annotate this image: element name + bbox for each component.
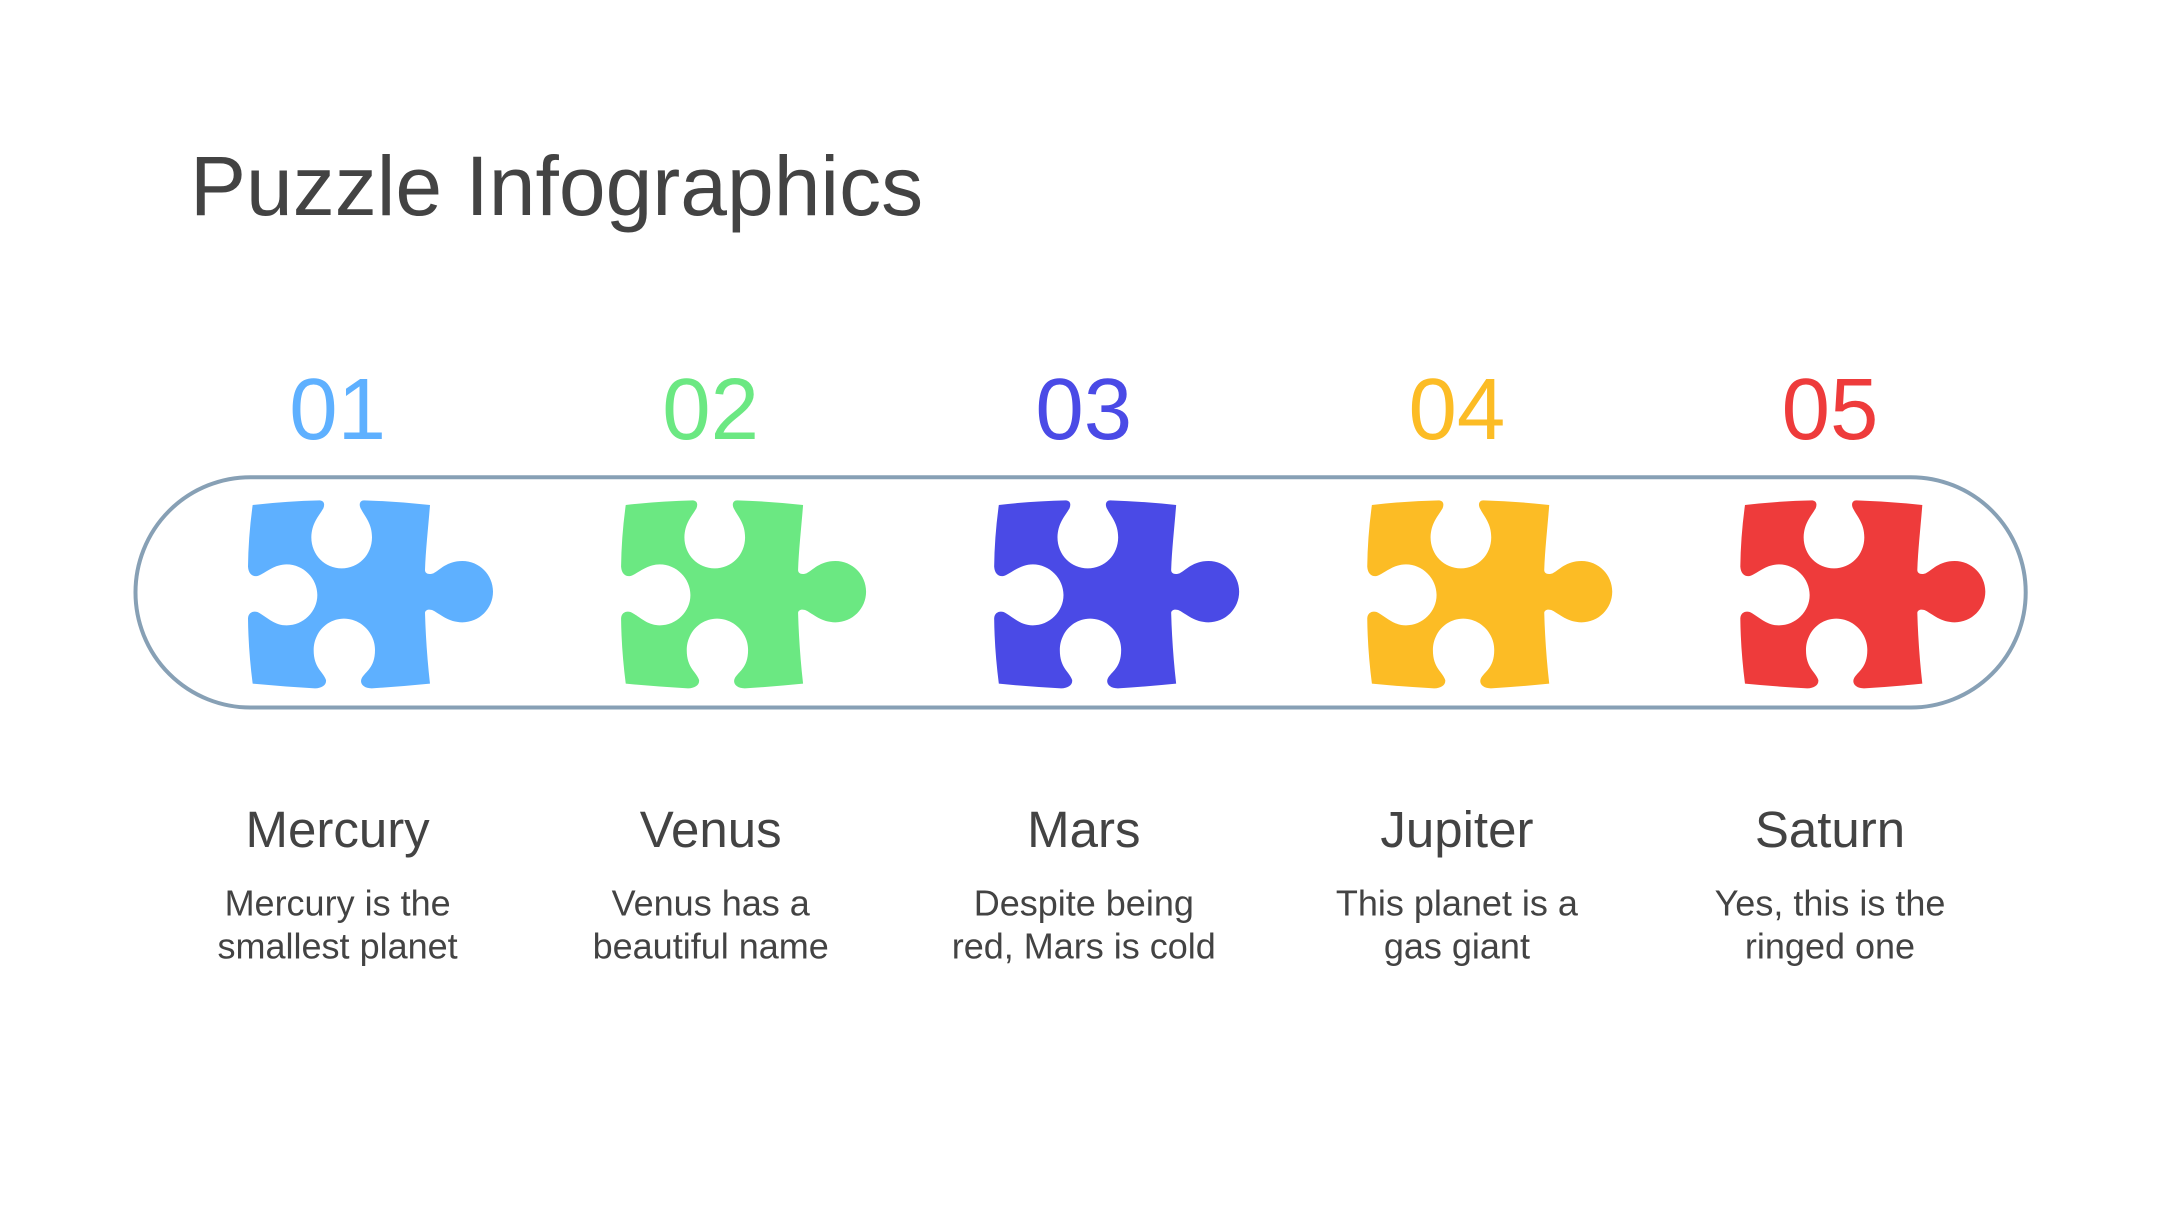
column 4: Jupiter <box>1336 361 1612 966</box>
icon: indigo puzzle piece <box>994 500 1239 688</box>
heading: Mars: Mars <box>1027 801 1140 858</box>
text: Mars description: Despite being <box>974 882 1194 924</box>
title: Puzzle Infographics <box>190 139 923 233</box>
icon: blue puzzle piece <box>248 500 493 688</box>
text: Saturn description: ringed one <box>1745 926 1915 966</box>
icon: yellow puzzle piece <box>1367 500 1612 688</box>
text: Jupiter description: gas giant <box>1384 926 1530 966</box>
column 3: Mars <box>952 361 1239 966</box>
column 2: Venus <box>593 361 866 966</box>
heading: Jupiter: Jupiter <box>1380 801 1533 858</box>
text: Jupiter description: This planet is a <box>1336 882 1579 924</box>
rounded capsule outline <box>136 477 2026 708</box>
text: Saturn description: Yes, this is the <box>1715 882 1945 924</box>
number 04: 04 <box>1409 361 1505 458</box>
heading: Venus: Venus <box>640 801 782 858</box>
text: Venus description: Venus has a <box>612 882 811 924</box>
text: Venus description: beautiful name <box>593 926 829 966</box>
icon: green puzzle piece <box>621 500 866 688</box>
text: Mercury description: Mercury is the <box>225 882 451 924</box>
heading: Saturn: Saturn <box>1755 801 1905 858</box>
text: Mars description: red, Mars is cold <box>952 926 1216 966</box>
column 5: Saturn <box>1715 361 1985 966</box>
icon: red puzzle piece <box>1740 500 1985 688</box>
column 1: Mercury <box>218 361 493 966</box>
text: Mercury description: smallest planet <box>218 926 458 966</box>
number 05: 05 <box>1782 361 1878 458</box>
number 02: 02 <box>662 361 759 458</box>
number 03: 03 <box>1035 361 1132 458</box>
heading: Mercury: Mercury <box>246 801 430 858</box>
number 01: 01 <box>289 361 386 458</box>
